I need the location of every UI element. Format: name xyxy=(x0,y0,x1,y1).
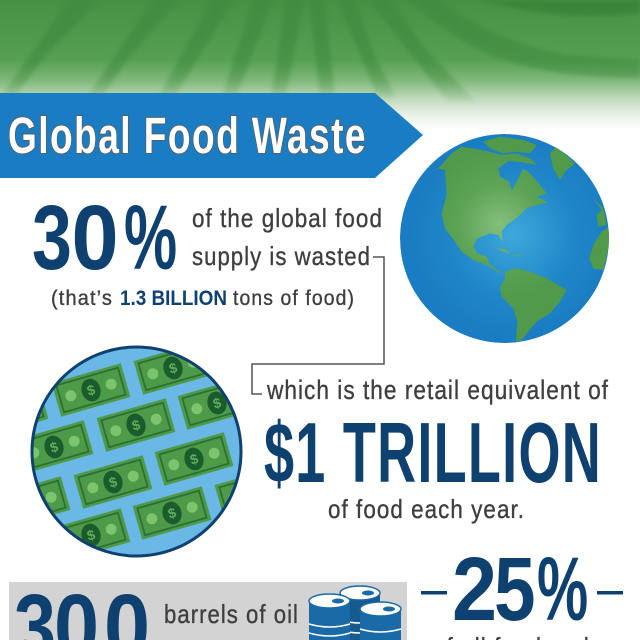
icon: oil barrels xyxy=(309,586,401,640)
icon: circle of dollar bills xyxy=(30,346,242,558)
stat: 30% xyxy=(32,186,177,289)
header: green sunburst background xyxy=(0,0,640,130)
text: 1.3 billion tons: tons of food) xyxy=(233,287,355,310)
stat: 30%: 0 xyxy=(72,186,119,289)
stat: 30%: 3 xyxy=(32,186,72,289)
stat: 25% with dashes xyxy=(421,538,623,640)
text: of food each year: of food each year. xyxy=(328,494,525,524)
text: supply is wasted: supply is wasted xyxy=(192,241,371,271)
stat: 300 xyxy=(16,594,147,640)
title banner xyxy=(0,93,423,178)
text: 1.3 billion tons: (that’s xyxy=(51,287,113,310)
text: 1.3 billion tons xyxy=(51,287,355,310)
icon: globe xyxy=(400,134,610,343)
stat: 30%: % xyxy=(124,187,177,289)
stat: 25% with dashes: % xyxy=(537,540,588,640)
dark top-right arc xyxy=(480,0,640,16)
connector line xyxy=(252,257,384,394)
text: barrels of oil: barrels of oil xyxy=(164,599,299,629)
text: 1.3 billion tons: 1.3 BILLION xyxy=(120,287,227,310)
title: Global Food Waste xyxy=(8,107,367,164)
stat: 25% with dashes: 5 xyxy=(494,538,536,640)
stat: 25% with dashes: 2 xyxy=(452,539,497,640)
text: of the global food: of the global food xyxy=(192,203,383,233)
panel: 300 barrels of oil xyxy=(9,582,407,640)
